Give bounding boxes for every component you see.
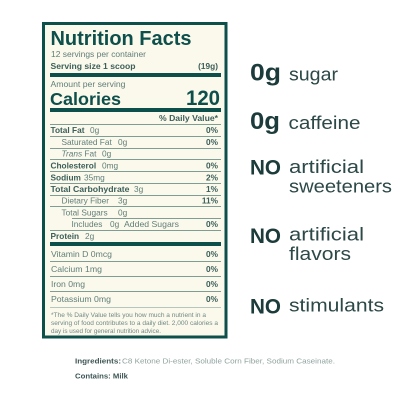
row: calories: 120 [186,87,220,110]
row: total carbohydrate: 1% [206,184,219,194]
claim: no artificial flavors [250,224,364,264]
row: sodium: 35mg [84,172,105,182]
row: cholesterol: 0% [206,160,219,170]
heading: Nutrition Facts: Nutrition Facts [50,27,192,50]
row: iron [51,279,219,289]
row: dietary fiber [62,196,219,206]
row: added sugars: 0% [206,219,219,229]
row: sodium [50,172,219,182]
row: total carbohydrate [50,184,219,194]
claim: 0g caffeine [250,108,360,135]
claim: 0g caffeine: 0g [250,108,280,135]
row: iron: 0% [206,279,219,289]
row: trans fat: Trans Fat [62,148,97,158]
row: total carbohydrate: Total Carbohydrate [50,184,130,194]
claim: 0g caffeine: caffeine [288,112,360,133]
claim: no stimulants: stimulants [289,295,384,316]
row: added sugars: Added Sugars [124,219,179,229]
row: saturated fat [62,137,219,147]
row: cholesterol: 0mg [102,160,119,170]
contains: Contains: Milk [75,372,129,380]
row: total carbohydrate: 3g [134,184,144,194]
row: cholesterol [50,160,219,170]
row: sodium: 2% [206,172,219,182]
row: total sugars: Total Sugars [62,208,108,218]
row: calcium [51,264,219,274]
row: sodium: Sodium [50,172,81,182]
footnote: *The % Daily Value tells you how much a nutrient in a [51,313,207,319]
panel: nutrition facts label [44,24,226,337]
row: potassium [51,294,219,304]
row: saturated fat: Saturated Fat [62,137,112,147]
claim: 0g sugar [250,60,338,86]
row: iron: Iron 0mg [51,279,85,289]
row: potassium: 0% [206,294,219,304]
row: added sugars: Includes [72,219,102,229]
row: total fat: Total Fat [50,125,85,135]
text: amount per serving: Amount per serving [50,79,126,89]
row: calcium: Calcium 1mg [51,264,102,274]
row: calories [50,87,220,110]
row: serving size: (19g) [198,61,218,71]
claim: no artificial sweeteners: artificial [289,156,364,177]
claim: no stimulants: NO [250,295,281,318]
claim: no stimulants [250,295,384,318]
claim: no artificial flavors: NO [250,225,281,248]
row: total fat: 0% [206,125,219,135]
row: protein [50,231,95,241]
claim: no artificial sweeteners: NO [250,156,281,180]
footnote: serving of food contributes to a daily diet. 2,000 calories a [51,321,219,327]
row: total sugars: 0g [118,208,128,218]
row: saturated fat: 0% [206,137,219,147]
claim: 0g sugar: sugar [289,64,338,85]
claim: no artificial sweeteners: sweeteners [289,176,392,196]
row: protein: 2g [85,231,95,241]
row: dietary fiber: 11% [202,196,219,206]
footnote [51,313,219,335]
row: trans fat [62,148,112,158]
row: vitamin D: 0% [206,249,219,259]
ingredients: Ingredients: [75,356,121,366]
row: added sugars: 0g [110,219,120,229]
footnote: day is used for general nutrition advice. [51,329,161,335]
row: trans fat: 0g [102,148,112,158]
row: vitamin D: Vitamin D 0mcg [51,249,112,259]
claim: 0g sugar: 0g [250,60,281,86]
row: serving size [50,61,218,71]
claim: no artificial flavors: flavors [289,243,351,264]
row: protein: Protein [50,231,79,241]
text: percent daily value: % Daily Value* [159,113,219,123]
claim: no artificial flavors: artificial [289,224,364,245]
row: calories: Calories [50,89,121,109]
row: potassium: Potassium 0mg [51,294,111,304]
row: saturated fat: 0g [118,137,128,147]
row: added sugars [72,219,219,229]
row: serving size: Serving size 1 scoop [50,61,136,71]
row: calcium: 0% [206,264,219,274]
ingredients: C8 Ketone Di-ester, Soluble Corn Fiber, Sodium Caseinate. [122,356,335,366]
row: dietary fiber: 3g [118,196,128,206]
text: servings per container: 12 servings per container [51,49,146,59]
row: vitamin D [51,249,219,259]
row: cholesterol: Cholesterol [50,160,96,170]
row: total fat [50,125,219,135]
row: total sugars [62,208,128,218]
row: dietary fiber: Dietary Fiber [62,196,109,206]
claim: no artificial sweeteners [250,156,392,196]
row: total fat: 0g [90,125,100,135]
